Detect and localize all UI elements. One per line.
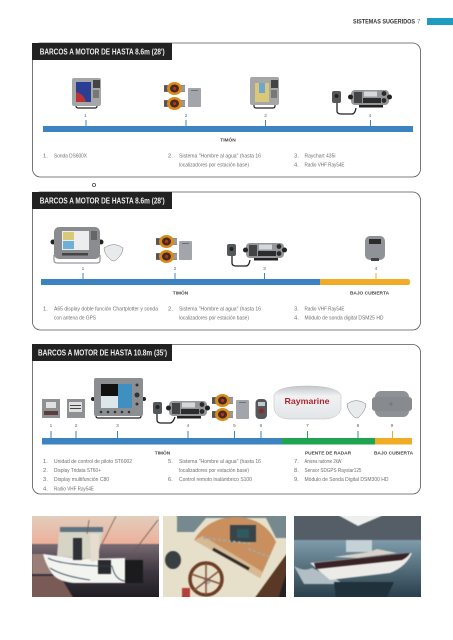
- panel: boats up to 10.8m: [32, 344, 420, 494]
- equipment list: Radio VHF Ray54E: [304, 306, 345, 312]
- timeline numbers: 9: [391, 423, 394, 429]
- photo: fishing boat at sunset: [32, 516, 159, 597]
- equipment list: 3.: [294, 154, 299, 160]
- timeline bar: [42, 431, 412, 444]
- equipment list: Módulo de Sonda Digital DSM300 HD: [304, 477, 388, 483]
- equipment list: Raychart 435i: [304, 154, 336, 160]
- icon: VHF radio: [227, 243, 287, 266]
- equipment list: 7.: [294, 459, 299, 465]
- equipment list: Sistema "Hombre al agua" (hasta 16: [179, 154, 261, 160]
- icon: man overboard system: [164, 82, 201, 110]
- equipment list: localizadores por estación base): [179, 316, 249, 322]
- icon: ST6002 control unit: [42, 399, 60, 418]
- equipment list: 4.: [294, 162, 299, 168]
- timeline numbers: 4: [375, 266, 378, 272]
- page heading: 7: [417, 20, 421, 26]
- timeline numbers: 3: [116, 423, 119, 429]
- icon: man overboard system: [156, 235, 192, 263]
- equipment list: [43, 154, 345, 168]
- equipment list: [43, 306, 384, 322]
- icon: DSM300 module: [372, 391, 412, 417]
- timeline numbers: 3: [263, 266, 266, 272]
- icon: sonar DS600X: [72, 78, 101, 108]
- zone labels: [173, 288, 390, 296]
- equipment list: Sistema "Hombre al agua" (hasta 16: [179, 306, 261, 312]
- timeline numbers: 1: [84, 113, 87, 119]
- timeline numbers: 6: [260, 423, 263, 429]
- timeline numbers: 5: [233, 423, 236, 429]
- teal tab: [427, 18, 453, 25]
- equipment list: Radio VHF Ray54E: [54, 486, 94, 492]
- heading: panel one: BARCOS A MOTOR DE HASTA 8.6m (28'): [40, 48, 165, 56]
- icon: man overboard system: [212, 394, 249, 421]
- heading: panel three: BARCOS A MOTOR DE HASTA 10.8m (35'): [38, 348, 167, 358]
- icon: DSM25 sounder module: [365, 236, 385, 261]
- equipment list: Control remoto inalámbrico S100: [179, 477, 252, 483]
- equipment list: 2.: [168, 306, 173, 312]
- timeline numbers: [82, 266, 378, 272]
- photo: helm and dashboard: [163, 516, 286, 597]
- timeline numbers: 3: [264, 113, 267, 119]
- zone labels: PUENTE DE RADAR: [305, 450, 352, 456]
- equipment list: Sonda DS600X: [54, 154, 87, 160]
- panel: boats up to 8.6m, option two: [32, 192, 420, 330]
- heading: panel two: BARCOS A MOTOR DE HASTA 8.6m (28'): [40, 196, 165, 206]
- icon: Tridata display: [67, 399, 85, 418]
- panel: boats up to 8.6m, option one: [32, 43, 420, 177]
- zone labels: TIMÓN: [155, 448, 171, 456]
- timeline numbers: 7: [306, 423, 309, 429]
- zone labels: TIMÓN: [173, 288, 189, 296]
- equipment list: 2.: [168, 154, 173, 160]
- timeline bar: [43, 120, 413, 132]
- zone labels: [155, 448, 414, 456]
- timeline numbers: [84, 113, 372, 119]
- equipment list: Sensor SDGPS Raystar125: [304, 468, 362, 474]
- equipment list: 1.: [43, 154, 48, 160]
- icon: VHF radio Ray54E: [332, 90, 392, 114]
- timeline numbers: 8: [357, 423, 360, 429]
- icon: GPS antenna: [104, 244, 123, 261]
- equipment list: 2.: [43, 468, 48, 474]
- equipment list: localizadores por estación base): [179, 468, 249, 474]
- equipment list: 9.: [294, 477, 299, 483]
- heading: panel one: [32, 43, 172, 60]
- icon: VHF radio: [153, 401, 210, 423]
- equipment list: 4.: [294, 316, 299, 322]
- equipment list: 1.: [43, 306, 48, 312]
- timeline numbers: [50, 423, 394, 429]
- timeline numbers: 4: [369, 113, 372, 119]
- timeline numbers: 1: [50, 423, 53, 429]
- icon: radome antenna with brand: [274, 386, 341, 419]
- equipment list: 6.: [168, 477, 173, 483]
- equipment list: Sistema "Hombre al agua" (hasta 16: [179, 459, 261, 465]
- equipment list: Display multifunción C80: [54, 477, 109, 483]
- equipment list: 4.: [43, 486, 48, 492]
- equipment list: [43, 459, 388, 492]
- icon: A65 display: [50, 227, 104, 263]
- heading: panel three: [32, 344, 172, 361]
- timeline numbers: 4: [187, 423, 190, 429]
- equipment list: Unidad de control de piloto ST6002: [54, 459, 132, 465]
- equipment list: 5.: [168, 459, 173, 465]
- icon: radome antenna with brand: Raymarine: [284, 396, 330, 406]
- equipment list: Módulo de sonda digital DSM25 HD: [304, 316, 384, 322]
- icon: Raystar125 GPS sensor: [347, 400, 366, 418]
- equipment list: Antena radome 2kW: [304, 459, 342, 465]
- equipment list: 3.: [294, 306, 299, 312]
- icon: S100 remote: [256, 399, 267, 419]
- equipment list: localizadores por estación base): [179, 162, 249, 168]
- timeline numbers: 2: [174, 266, 177, 272]
- equipment list: Display Tridata ST60+: [54, 468, 101, 474]
- equipment list: A65 display doble función Chartplotter y sonda: [54, 306, 159, 312]
- zone labels: BAJO CUBIERTA: [374, 450, 414, 456]
- zone labels: BAJO CUBIERTA: [350, 290, 390, 296]
- photo: speedboat on lake: [294, 516, 421, 597]
- separator letter O: O: [92, 183, 97, 189]
- page heading: SISTEMAS SUGERIDOS: [353, 20, 415, 26]
- timeline numbers: 2: [75, 423, 78, 429]
- equipment list: con antena de GPS: [54, 316, 96, 322]
- zone label: TIMÓN: [220, 136, 236, 144]
- equipment list: 1.: [43, 459, 48, 465]
- timeline numbers: 1: [82, 266, 85, 272]
- heading: panel two: [32, 192, 172, 209]
- equipment list: 8.: [294, 468, 299, 474]
- equipment list: Radio VHF Ray54E: [304, 162, 345, 168]
- timeline bar: [41, 273, 410, 285]
- timeline numbers: 2: [185, 113, 188, 119]
- icon: C80 multifunction display: [91, 378, 146, 418]
- equipment list: 3.: [43, 477, 48, 483]
- icon: Raychart 435i: [250, 77, 279, 108]
